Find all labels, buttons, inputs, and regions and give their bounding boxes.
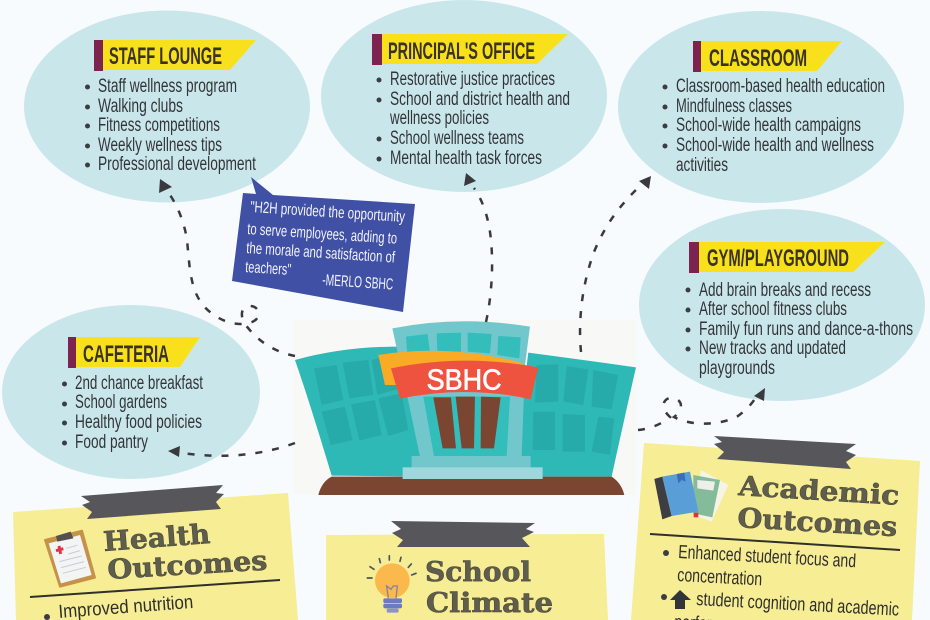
list: staff lounge items: Weekly wellness tips [98, 135, 222, 156]
heading: health outcomes [102, 519, 268, 586]
list: principal's office items: wellness policies [389, 108, 489, 129]
list: academic outcomes [661, 542, 900, 620]
list: staff lounge items: Staff wellness program [98, 76, 237, 97]
heading: school climate: School [425, 557, 531, 588]
tape [391, 521, 535, 547]
callout: staff quote [232, 177, 415, 312]
list: staff lounge items: Professional development [98, 154, 257, 175]
list: gym/playground items: After school fitness clubs [699, 299, 847, 320]
arrow: building to classroom [580, 176, 651, 352]
list: principal's office items: School and district health and [390, 89, 570, 110]
heading: health outcomes: Health [102, 519, 212, 558]
panel: gym/playground [639, 209, 925, 401]
panel: health outcomes note [13, 485, 298, 620]
callout: staff quote: to serve employees, adding to [247, 221, 398, 248]
heading: cafeteria: CAFETERIA [83, 341, 169, 368]
arrow: building to gym/playground [638, 388, 765, 430]
callout: staff quote: the morale and satisfaction of [246, 240, 396, 267]
heading: principal's office: PRINCIPAL'S OFFICE [388, 38, 535, 65]
list: academic outcomes: Enhanced student focus and [678, 542, 857, 572]
list: academic outcomes: concentration [677, 565, 763, 590]
heading: school climate: Climate [426, 588, 553, 619]
icon: clipboard [45, 531, 95, 587]
list: principal's office items: School wellness teams [390, 128, 524, 149]
heading: health outcomes: Outcomes [107, 546, 268, 586]
heading: staff lounge [94, 40, 256, 71]
list: gym/playground items: New tracks and updated [699, 338, 846, 359]
list: classroom items [662, 76, 885, 176]
panel: principal's office [321, 0, 607, 192]
list: principal's office items: Mental health task forces [390, 148, 542, 169]
heading: classroom [693, 41, 842, 72]
heading: staff lounge: STAFF LOUNGE [109, 43, 222, 70]
heading: gym/playground [689, 242, 885, 273]
arrow: building to staff lounge [159, 179, 295, 356]
illustration: school building: SBHC [427, 364, 502, 396]
heading: school climate [425, 557, 553, 619]
icon: light bulb [367, 556, 416, 613]
callout: staff quote: -MERLO SBHC [322, 272, 394, 294]
list: classroom items: Mindfulness classes [676, 96, 792, 117]
tape [81, 485, 224, 519]
tape [714, 436, 856, 469]
panel: school climate note [326, 521, 608, 620]
heading: classroom: CLASSROOM [709, 45, 807, 72]
list: principal's office items: Restorative justice practices [390, 69, 555, 90]
panel: classroom [618, 11, 904, 203]
list: cafeteria items [62, 373, 204, 453]
list: principal's office items [376, 69, 570, 169]
panel: cafeteria [2, 305, 260, 479]
callout: staff quote: teachers" [245, 259, 292, 279]
list: cafeteria items: Healthy food policies [75, 412, 202, 433]
list: staff lounge items [85, 76, 257, 175]
heading: academic outcomes: Academic [736, 471, 900, 512]
list: classroom items: School-wide health campaigns [676, 115, 861, 136]
arrow: building to principal's office [464, 173, 492, 322]
panel: staff lounge [24, 10, 310, 202]
list: cafeteria items: School gardens [75, 392, 167, 413]
list: staff lounge items: Walking clubs [98, 96, 183, 117]
panel: academic outcomes note [631, 436, 920, 620]
list: classroom items: activities [676, 155, 728, 176]
heading: principal's office [372, 34, 568, 65]
list: cafeteria items: 2nd chance breakfast [75, 373, 204, 394]
list: gym/playground items [686, 280, 913, 379]
heading: gym/playground: GYM/PLAYGROUND [707, 245, 849, 272]
callout: staff quote: "H2H provided the opportunity [250, 199, 406, 226]
heading: academic outcomes: Outcomes [737, 503, 898, 543]
heading: cafeteria [68, 337, 200, 368]
illustration: school building [293, 320, 637, 495]
list: gym/playground items: playgrounds [699, 358, 775, 379]
icon: books [654, 470, 728, 522]
list: staff lounge items: Fitness competitions [98, 115, 220, 136]
list: cafeteria items: Food pantry [75, 432, 148, 453]
heading: academic outcomes [736, 471, 900, 543]
arrow: building to cafeteria [168, 443, 295, 457]
